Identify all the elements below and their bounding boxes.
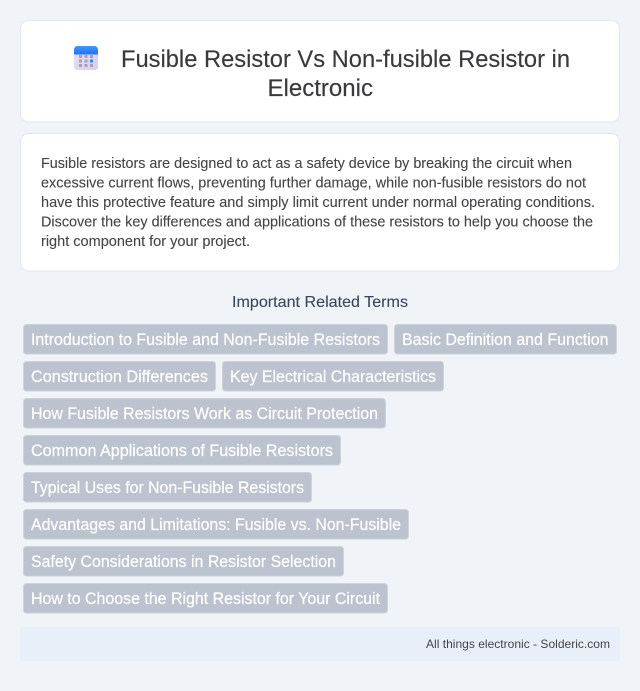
chip: Key Electrical Characteristics <box>230 368 436 386</box>
icon: calendar <box>74 46 98 70</box>
intro paragraph: Discover the key differences and applications of these resistors to help you choose the <box>41 214 593 230</box>
intro paragraph: Fusible resistors are designed to act as a safety device by breaking the circuit when <box>41 156 572 172</box>
heading: important related terms: Important Related Terms <box>232 294 408 311</box>
chip: Construction Differences <box>31 368 208 386</box>
chip <box>24 510 408 539</box>
chip: How Fusible Resistors Work as Circuit Protection <box>31 405 378 423</box>
panel: introduction <box>20 134 620 271</box>
chip: How to Choose the Right Resistor for Your Circuit <box>31 590 380 608</box>
chip <box>24 324 388 354</box>
title <box>121 46 570 102</box>
chip: Advantages and Limitations: Fusible vs. Non-Fusible <box>31 516 401 534</box>
intro paragraph: excessive current flows, preventing further damage, while non-fusible resistors do not <box>41 176 586 192</box>
chip <box>222 362 444 391</box>
chip <box>24 546 344 576</box>
intro paragraph: have this protective feature and simply limit current under normal operating conditions. <box>41 195 595 211</box>
chip: Basic Definition and Function <box>402 331 608 349</box>
chip: Safety Considerations in Resistor Selection <box>31 553 336 571</box>
chip <box>24 584 388 613</box>
footer <box>20 627 620 661</box>
related terms chips <box>24 324 616 613</box>
intro paragraph <box>41 156 595 250</box>
chip: Typical Uses for Non-Fusible Resistors <box>31 479 304 497</box>
panel: title card <box>20 20 620 122</box>
title: Electronic <box>268 75 373 102</box>
title: Fusible Resistor Vs Non-fusible Resistor in <box>121 46 570 73</box>
chip: Introduction to Fusible and Non-Fusible Resistors <box>31 331 380 349</box>
intro paragraph: right component for your project. <box>41 234 250 250</box>
chip <box>24 362 216 391</box>
footer: All things electronic - Solderic.com <box>426 637 610 651</box>
chip: Common Applications of Fusible Resistors <box>31 442 333 460</box>
chip <box>24 398 386 428</box>
chip <box>24 436 340 465</box>
chip <box>24 472 312 502</box>
chip <box>394 324 616 354</box>
